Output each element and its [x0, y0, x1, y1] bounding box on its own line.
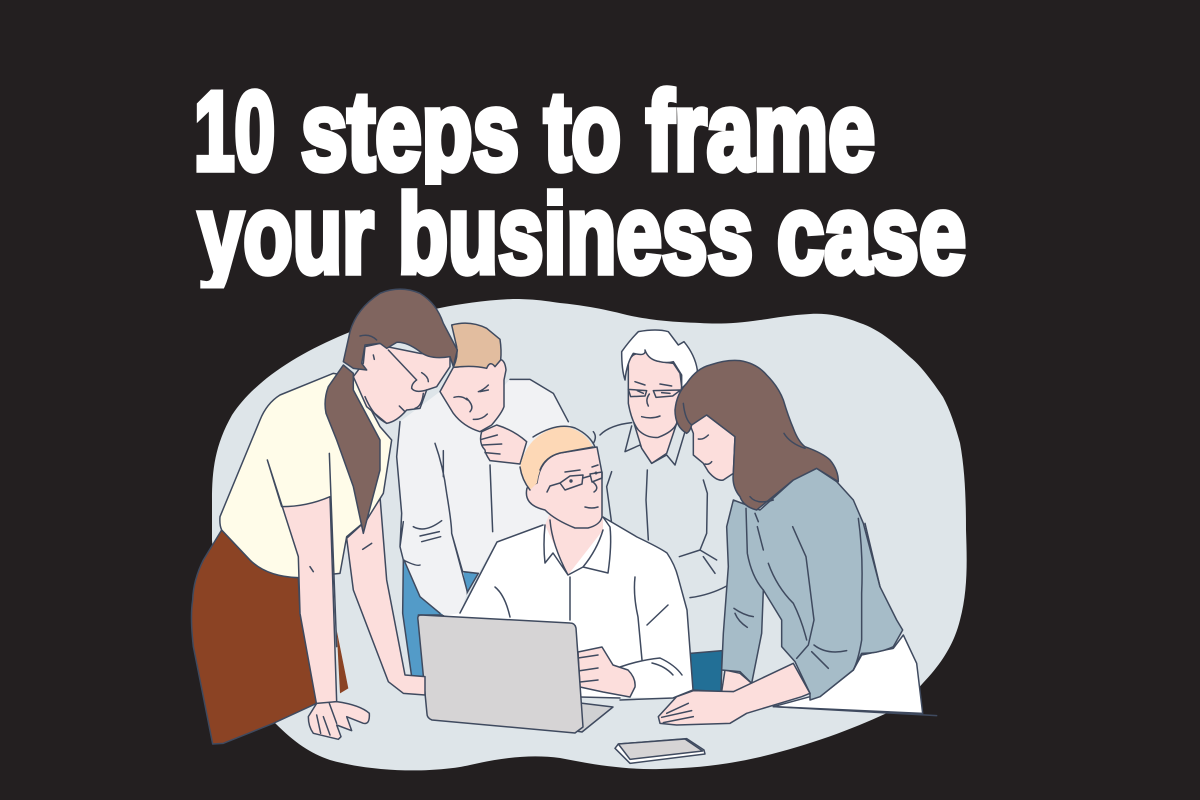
- skirt: [191, 530, 317, 744]
- hand on chin: [481, 425, 527, 464]
- face details: [360, 335, 428, 423]
- fingers: [662, 703, 693, 723]
- figure: woman on the right: [658, 360, 937, 725]
- far arm: [722, 670, 752, 692]
- shirt: [420, 517, 693, 698]
- face: [685, 412, 735, 480]
- laptop base: [570, 703, 613, 732]
- figure: seated man in white shirt: [420, 426, 693, 700]
- head: [628, 350, 682, 437]
- phone: [615, 739, 705, 763]
- shirt lines: [460, 517, 693, 700]
- skirt: [773, 635, 923, 713]
- fingers: [578, 655, 598, 682]
- shirt lines: [593, 423, 727, 598]
- title: case: [777, 172, 966, 296]
- glasses and face details: [547, 465, 602, 508]
- title: frame: [646, 70, 875, 194]
- laptop lid: [418, 615, 583, 733]
- hand: [308, 702, 369, 739]
- infographic canvas: [190, 85, 967, 770]
- sweater folds: [734, 508, 880, 670]
- shirt: [397, 379, 580, 615]
- title: steps: [301, 70, 519, 194]
- title: business: [398, 172, 753, 296]
- head: [440, 359, 506, 432]
- finger lines and blouse folds: [310, 453, 372, 735]
- hair: [520, 427, 593, 490]
- figure: woman on the left: [191, 289, 457, 744]
- collar: [544, 517, 611, 575]
- figure: man with tan hair: [397, 323, 580, 677]
- near arm: [658, 663, 810, 725]
- face and neck: [353, 343, 450, 423]
- hair: [675, 360, 838, 510]
- hair outline: [520, 426, 595, 490]
- laptop: [418, 615, 613, 733]
- fingers: [482, 435, 502, 454]
- hand: [578, 647, 635, 697]
- far arm: [347, 497, 425, 695]
- figure: man with white hair: [593, 330, 727, 692]
- background blob: [212, 299, 967, 770]
- title: your: [198, 172, 374, 296]
- sweater: [722, 468, 903, 700]
- neck: [545, 510, 603, 575]
- trousers: [403, 560, 478, 677]
- trousers: [690, 651, 722, 692]
- skirt back: [337, 630, 348, 693]
- neck: [634, 423, 677, 463]
- blouse: [220, 373, 392, 578]
- near arm: [267, 460, 337, 705]
- hair: [622, 330, 697, 388]
- title: to: [544, 70, 621, 194]
- title: [196, 85, 966, 288]
- glasses and face details: [628, 382, 681, 418]
- hair: [343, 289, 457, 370]
- hair: [452, 323, 501, 368]
- hair and face details: [683, 403, 805, 522]
- title: 10: [194, 70, 275, 194]
- table edge: [773, 707, 937, 716]
- shirt lines: [397, 379, 568, 613]
- ponytail: [325, 365, 380, 533]
- head: [526, 447, 602, 528]
- face details: [454, 385, 488, 419]
